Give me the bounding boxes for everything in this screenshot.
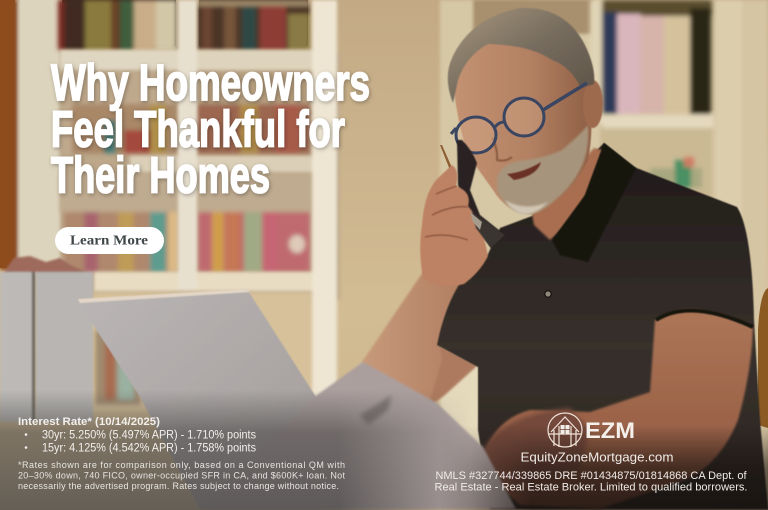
website: EquityZoneMortgage.com [520,450,674,464]
button: Learn More: Learn More [70,234,148,248]
hair [448,8,594,103]
head and face [453,34,591,214]
rate disclaimer: necessarily the advertised program. Rates subject to change without notice. [18,481,339,491]
chair at right edge [758,288,768,428]
nose shading [493,138,512,161]
telephone [457,140,505,248]
interest rate block: 30yr: 5.250% (5.497% APR) - 1.710% points [42,430,256,442]
bookcase books: lower row [60,174,310,272]
interest rate block: 15yr: 4.125% (4.542% APR) - 1.758% points [42,442,256,454]
interest rate block: Interest Rate* (10/14/2025) [18,416,160,428]
interest rate block [18,416,256,454]
area under bookcase [92,292,314,412]
ear [583,80,603,128]
left upper arm behind sleeve [400,345,478,410]
bookcase books: top row [58,0,310,50]
mouth [507,162,541,180]
logo: EZM [548,413,635,447]
left stack of grey files [0,256,93,422]
licensing text: NMLS #327744/339865 DRE #01434875/01814868 CA Dept. of [436,470,747,482]
bookcase frame [60,0,337,398]
bottom dark overlays [0,390,768,510]
rate disclaimer: *Rates shown are for comparison only, based on a Conventional QM with [18,460,345,470]
upper arm and forearm toward paper [480,310,753,509]
rate disclaimer: 20–30% down, 740 FICO, owner-occupied SFR in CA, and $600K+ loan. Not [18,470,345,480]
pen behind hand [440,145,453,170]
bookcase books: middle row [60,72,310,156]
man [362,8,768,509]
icon: house in circle [548,413,582,447]
writing blur on paper [360,395,392,425]
torso: dark polo shirt [437,143,768,509]
hand holding phone [420,165,488,286]
laptop [77,289,322,509]
finger creases [425,186,468,240]
placket button [545,291,551,297]
forearm supporting phone [362,272,470,400]
title: Feel Thankful for [51,100,345,158]
papers in foreground [205,362,516,509]
glasses [451,83,587,153]
collar [552,143,636,262]
licensing text [434,470,748,494]
neck [532,148,603,240]
button: Learn More [55,227,164,254]
beard [497,125,588,214]
right shelf with binders [590,0,714,188]
title [51,54,370,204]
title: Their Homes [51,146,270,204]
licensing text: Real Estate - Real Estate Broker. Limited to qualified borrowers. [434,482,748,494]
rate disclaimer [18,460,345,491]
hand blur [482,408,590,490]
phone end over fingers [472,212,505,248]
logo: EZM: EZM [585,418,635,443]
sleeve hem shade [656,311,753,327]
title: Why Homeowners [51,54,370,111]
